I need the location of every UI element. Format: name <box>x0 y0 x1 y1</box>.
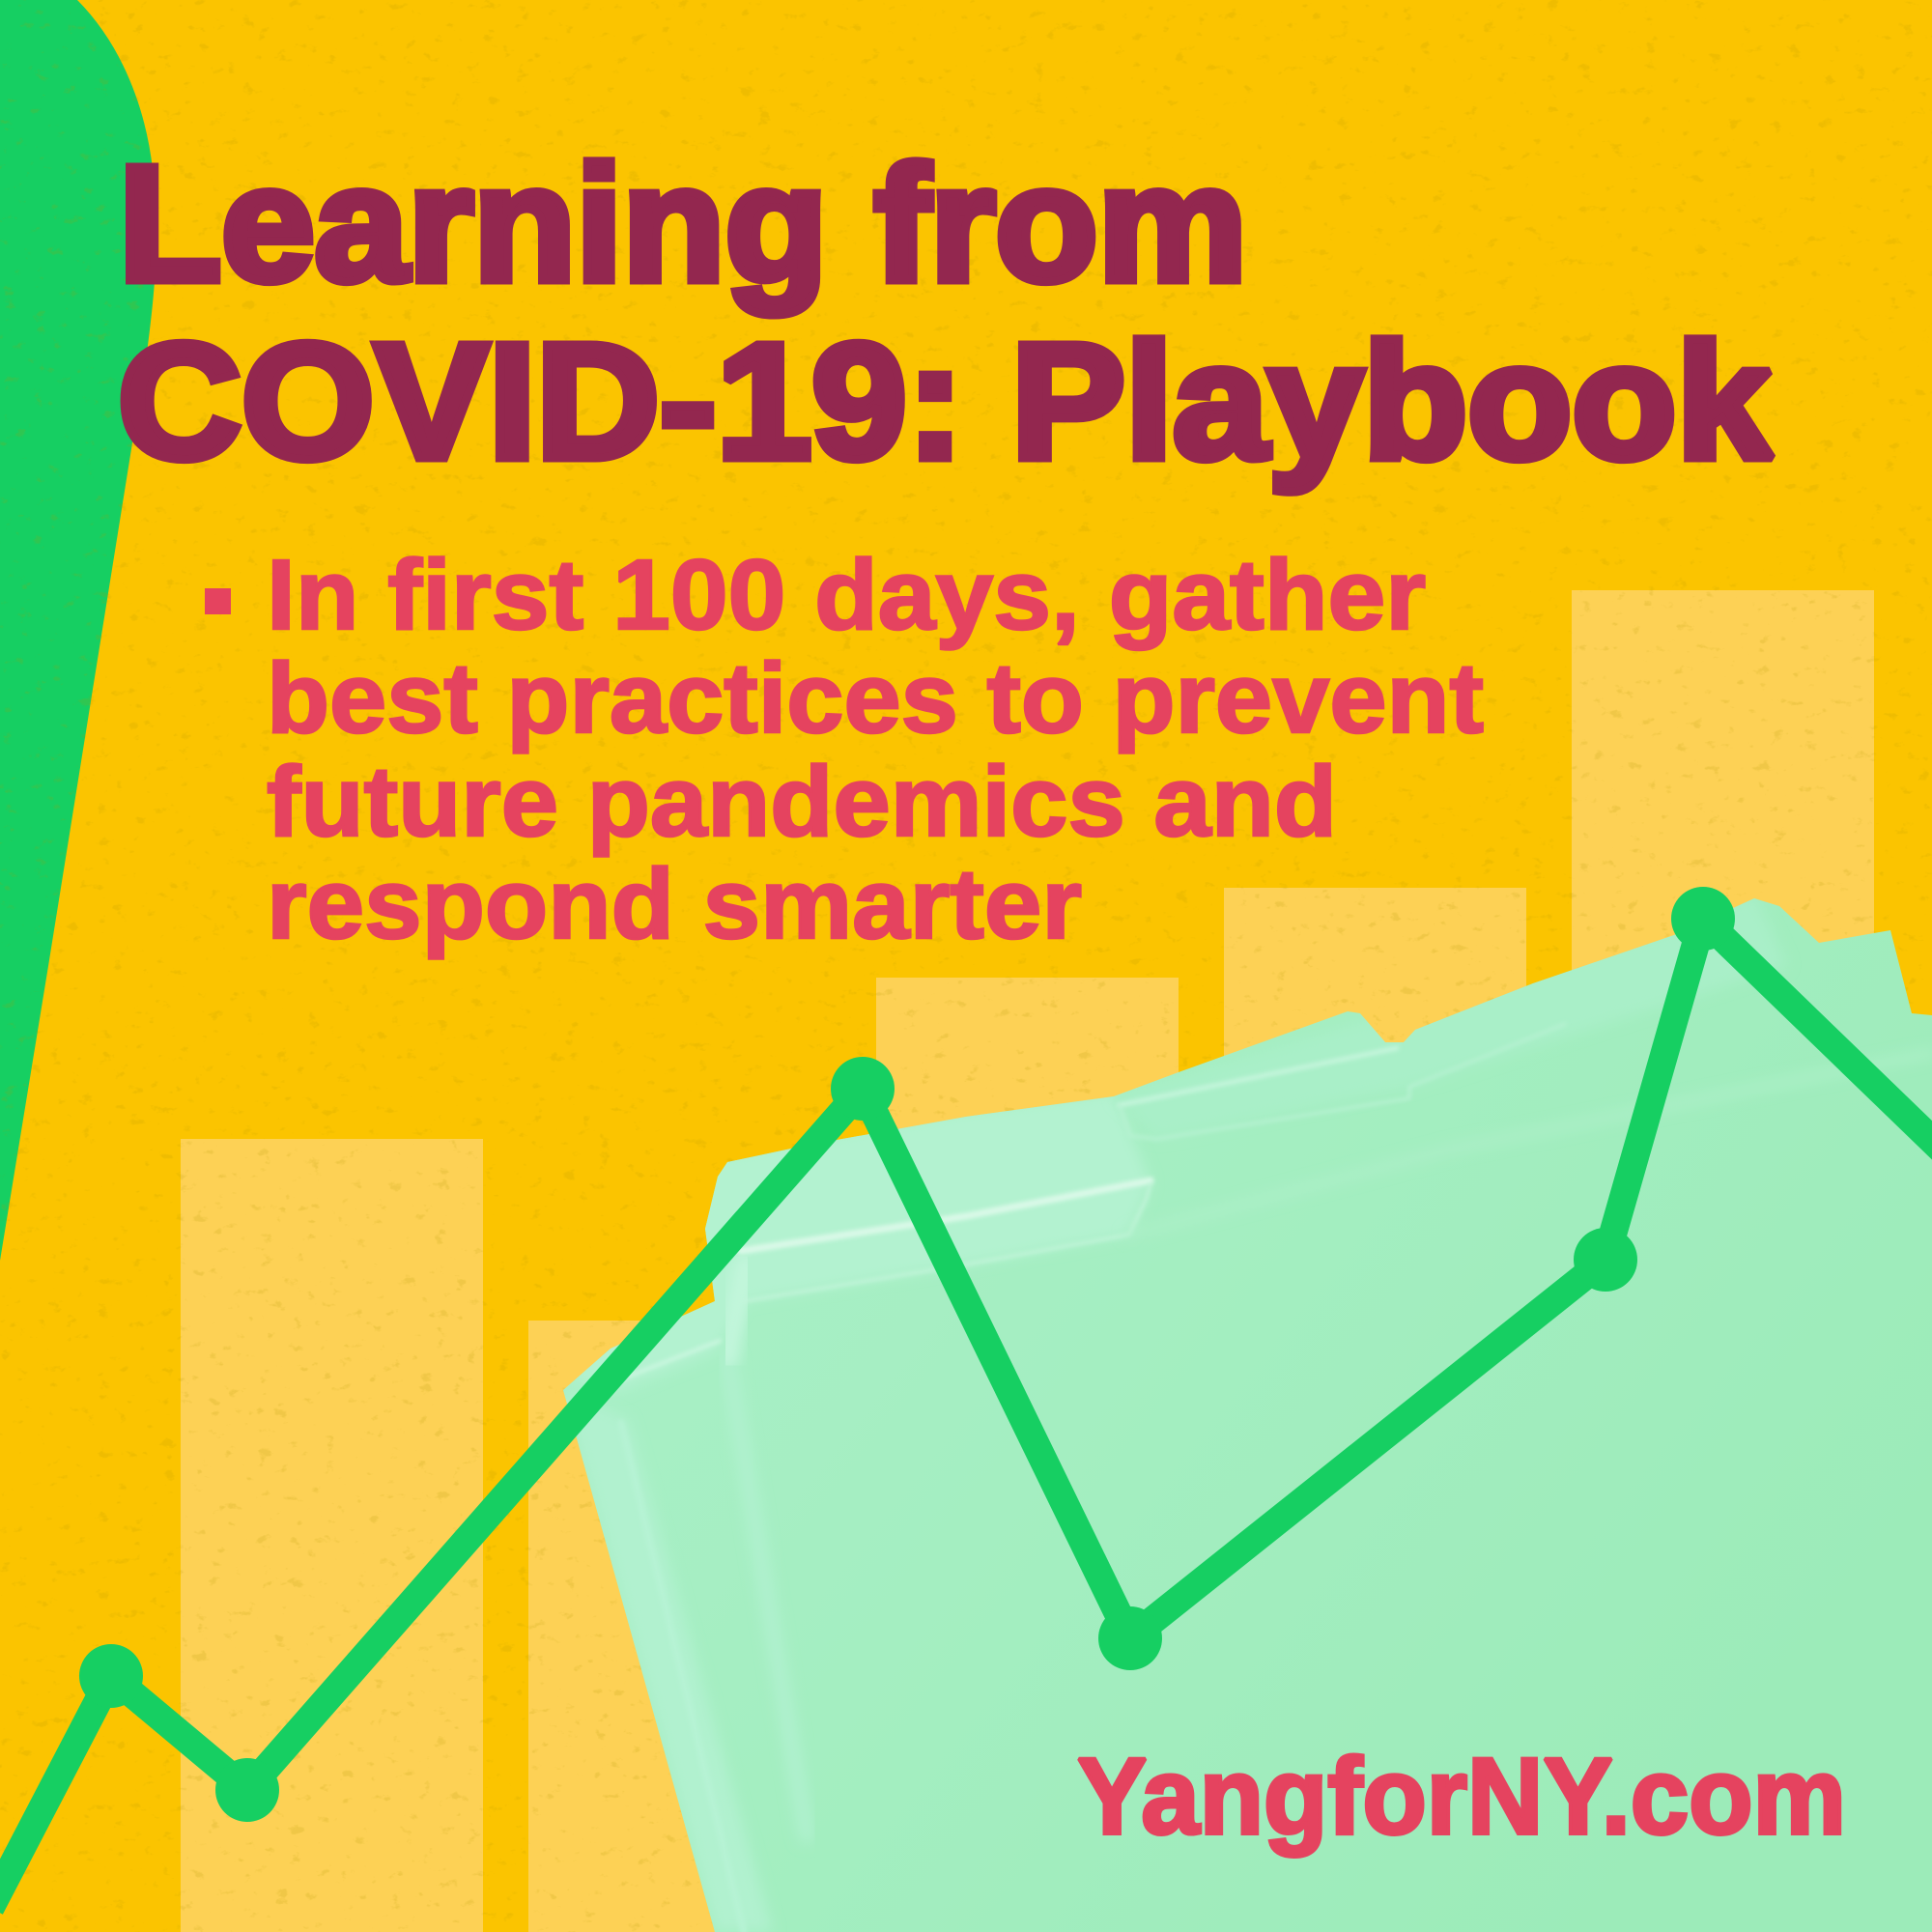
bullet text: future pandemics and <box>267 746 1337 857</box>
bar 2 <box>528 1321 831 1932</box>
website url: YangforNY.com <box>1077 1736 1846 1857</box>
bar 1 <box>181 1139 483 1932</box>
bullet text: In first 100 days, gather <box>267 539 1426 650</box>
bar chart <box>181 590 1874 1932</box>
folder left edge highlight <box>563 1390 773 1932</box>
folder rear tabs highlight <box>1121 898 1776 1094</box>
bar 4 <box>1224 888 1526 1932</box>
trend line <box>0 919 1932 1908</box>
folder body <box>541 889 1932 1932</box>
title <box>118 132 1772 494</box>
bullet text: respond smarter <box>267 848 1082 959</box>
bullet marker <box>205 588 231 614</box>
title: Learning from <box>119 132 1247 316</box>
title: COVID-19: Playbook <box>118 310 1772 494</box>
bullet text block <box>205 539 1484 959</box>
bullet text <box>267 539 1484 959</box>
folder illustration <box>541 889 1932 1932</box>
folder crease highlights <box>611 1024 1932 1932</box>
folder top band highlight <box>570 1092 1151 1391</box>
data points <box>79 887 1735 1822</box>
line chart <box>0 887 1932 1908</box>
bar 3 <box>876 978 1179 1932</box>
green curved shape <box>0 0 156 1261</box>
bar 5 <box>1572 590 1874 1932</box>
bullet text: best practices to prevent <box>267 642 1484 753</box>
